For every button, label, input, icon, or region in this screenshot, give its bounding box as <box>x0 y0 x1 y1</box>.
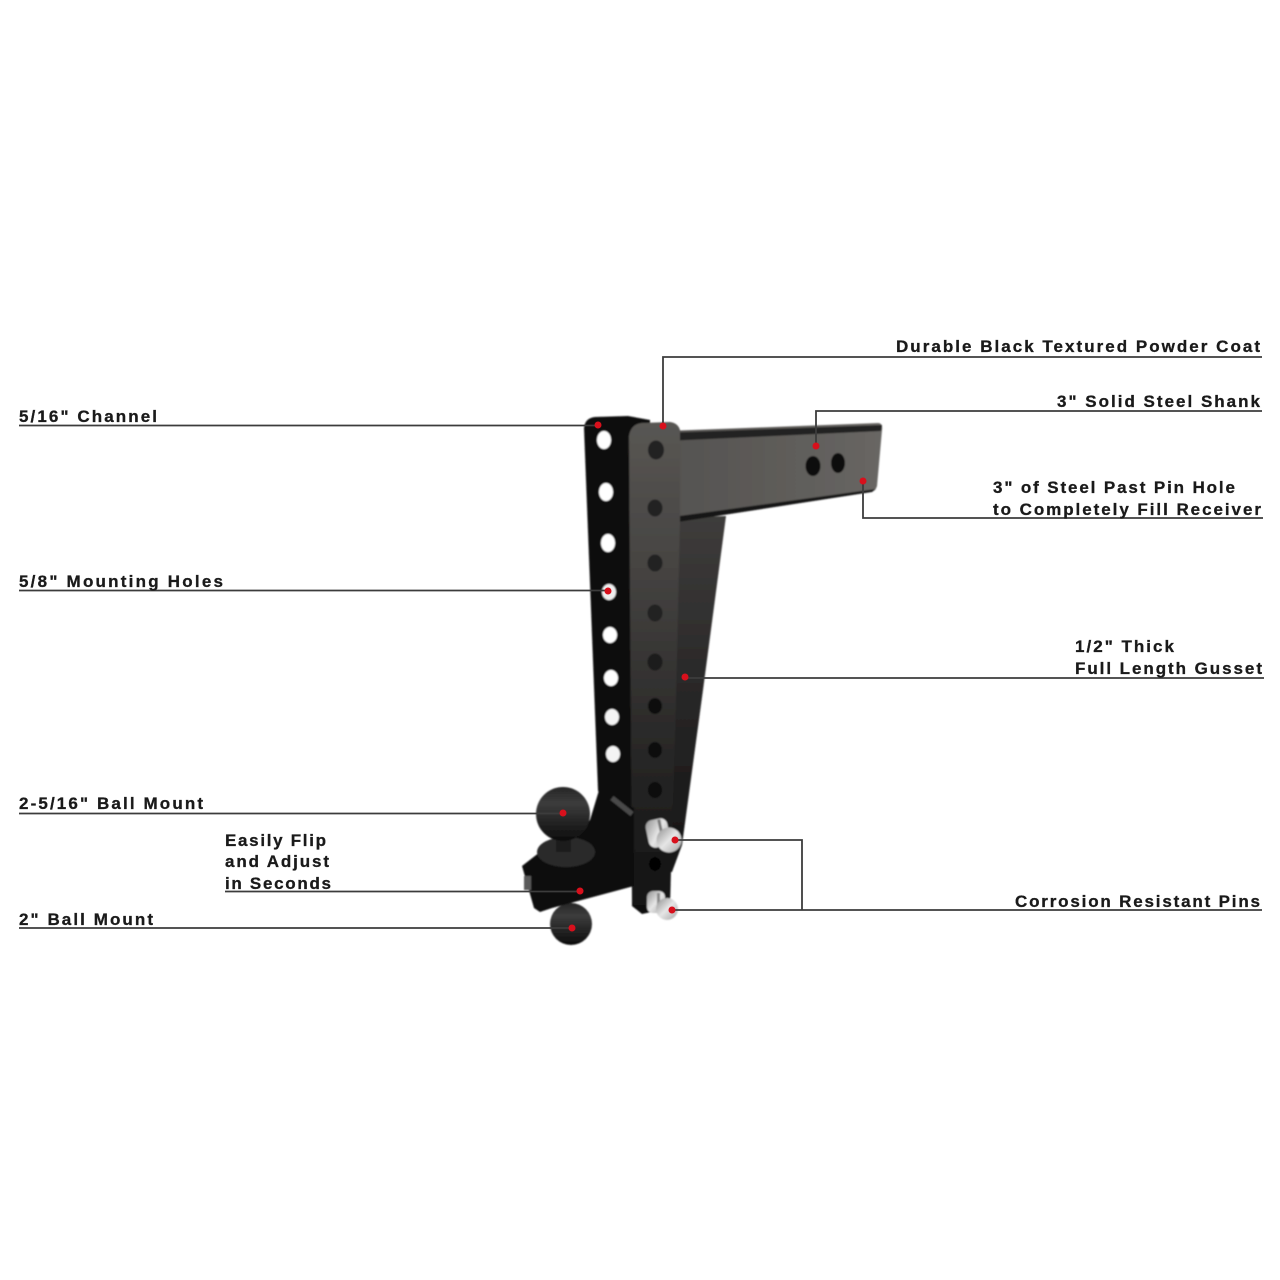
tow ball mount block <box>522 786 634 912</box>
label: steel past pin hole: 3" of Steel Past Pin Hole <box>993 478 1235 497</box>
label: 5/8 inch mounting holes: 5/8" Mounting Holes <box>19 572 223 591</box>
red callout dots <box>560 422 866 932</box>
rear channel with mounting holes <box>584 416 650 880</box>
label: 2-5/16 inch ball mount: 2-5/16" Ball Mount <box>19 794 203 813</box>
front plate with holes <box>629 422 680 914</box>
label: powder coat: Durable Black Textured Powder Coat <box>896 337 1260 356</box>
label: easily flip and adjust: in Seconds <box>225 874 331 893</box>
label: full length gusset <box>1075 637 1262 678</box>
label: easily flip and adjust <box>225 831 331 893</box>
label: full length gusset: 1/2" Thick <box>1075 637 1175 656</box>
label: steel past pin hole: to Completely Fill Receiver <box>993 500 1261 519</box>
label: 5/16 inch channel: 5/16" Channel <box>19 407 157 426</box>
callout lines <box>19 357 1264 928</box>
label: corrosion resistant pins: Corrosion Resistant Pins <box>1015 892 1260 911</box>
2-5/16 inch ball <box>536 787 590 852</box>
label: full length gusset: Full Length Gusset <box>1075 659 1262 678</box>
label: solid steel shank: 3" Solid Steel Shank <box>1057 392 1261 411</box>
lower pin <box>647 891 678 920</box>
label: steel past pin hole <box>993 478 1261 519</box>
gusset <box>665 516 726 872</box>
label: easily flip and adjust: Easily Flip <box>225 831 326 850</box>
upper pin <box>644 817 682 852</box>
2 inch ball <box>550 903 592 945</box>
hitch product illustration <box>522 416 882 945</box>
label: 2 inch ball mount: 2" Ball Mount <box>19 910 153 929</box>
steel shank <box>665 423 882 524</box>
label: easily flip and adjust: and Adjust <box>225 852 329 871</box>
